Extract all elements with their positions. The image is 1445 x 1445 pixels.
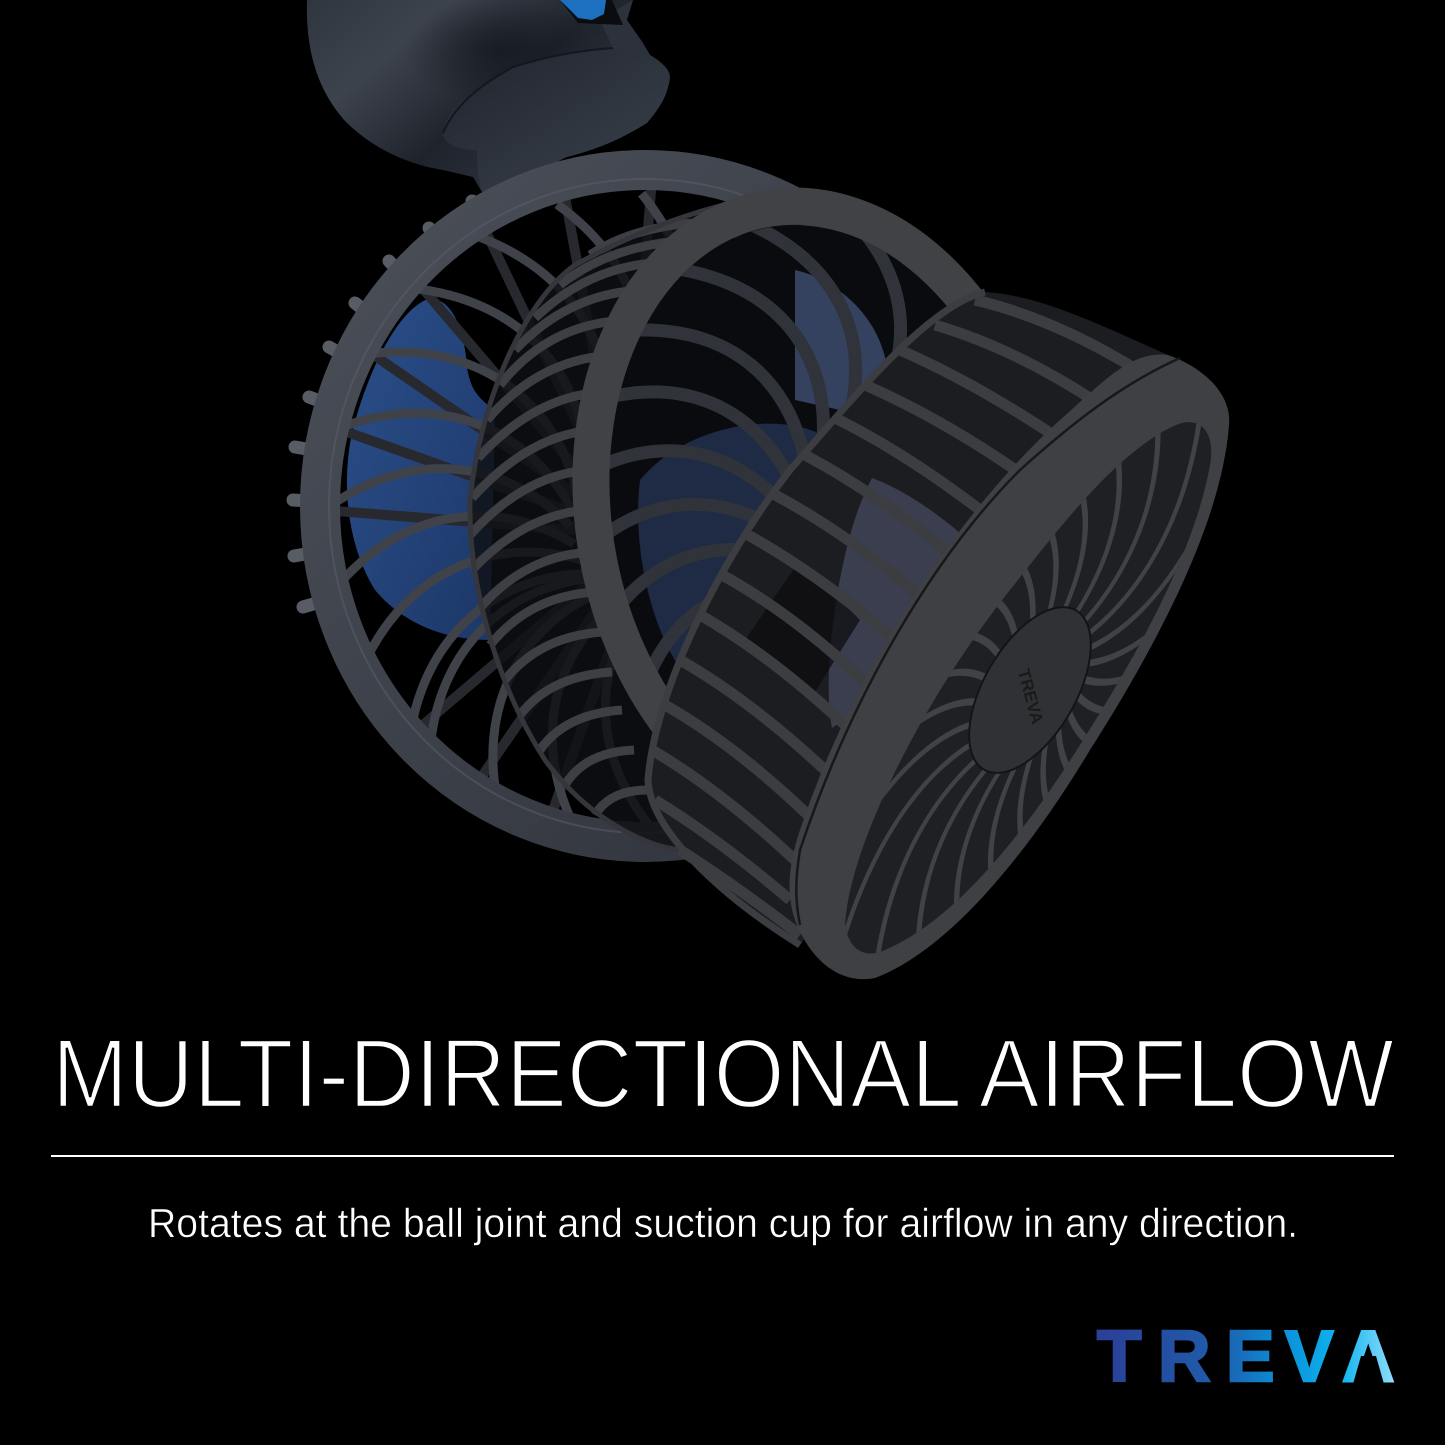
back ring [320, 170, 970, 842]
subtitle: Rotates at the ball joint and suction cup for airflow in any direction. [148, 1200, 1298, 1246]
logo: TREVA wordmark: TREVA [1097, 1316, 1394, 1397]
grip nubs [293, 201, 480, 607]
divider rule [51, 1155, 1394, 1157]
product image: clip-on fan in three rotated positions [286, 0, 1230, 980]
blue fan blades [347, 298, 495, 640]
middle ring [543, 169, 1097, 861]
title: MULTI-DIRECTIONAL AIRFLOW [52, 1019, 1394, 1128]
middle cage [470, 195, 820, 850]
hub with engraved brand: TREVA [1014, 667, 1047, 726]
suction cup base and ball joint [307, 0, 670, 192]
blue switch [560, 0, 606, 20]
front cage [648, 292, 1168, 945]
front grille [845, 422, 1212, 954]
middle fan position [466, 188, 981, 847]
front fan position [644, 288, 1230, 980]
middle interior [610, 225, 946, 672]
front ring [790, 355, 1229, 979]
ring seam [796, 358, 1180, 925]
back fan position [286, 150, 880, 862]
hub with engraved brand [944, 587, 1116, 793]
